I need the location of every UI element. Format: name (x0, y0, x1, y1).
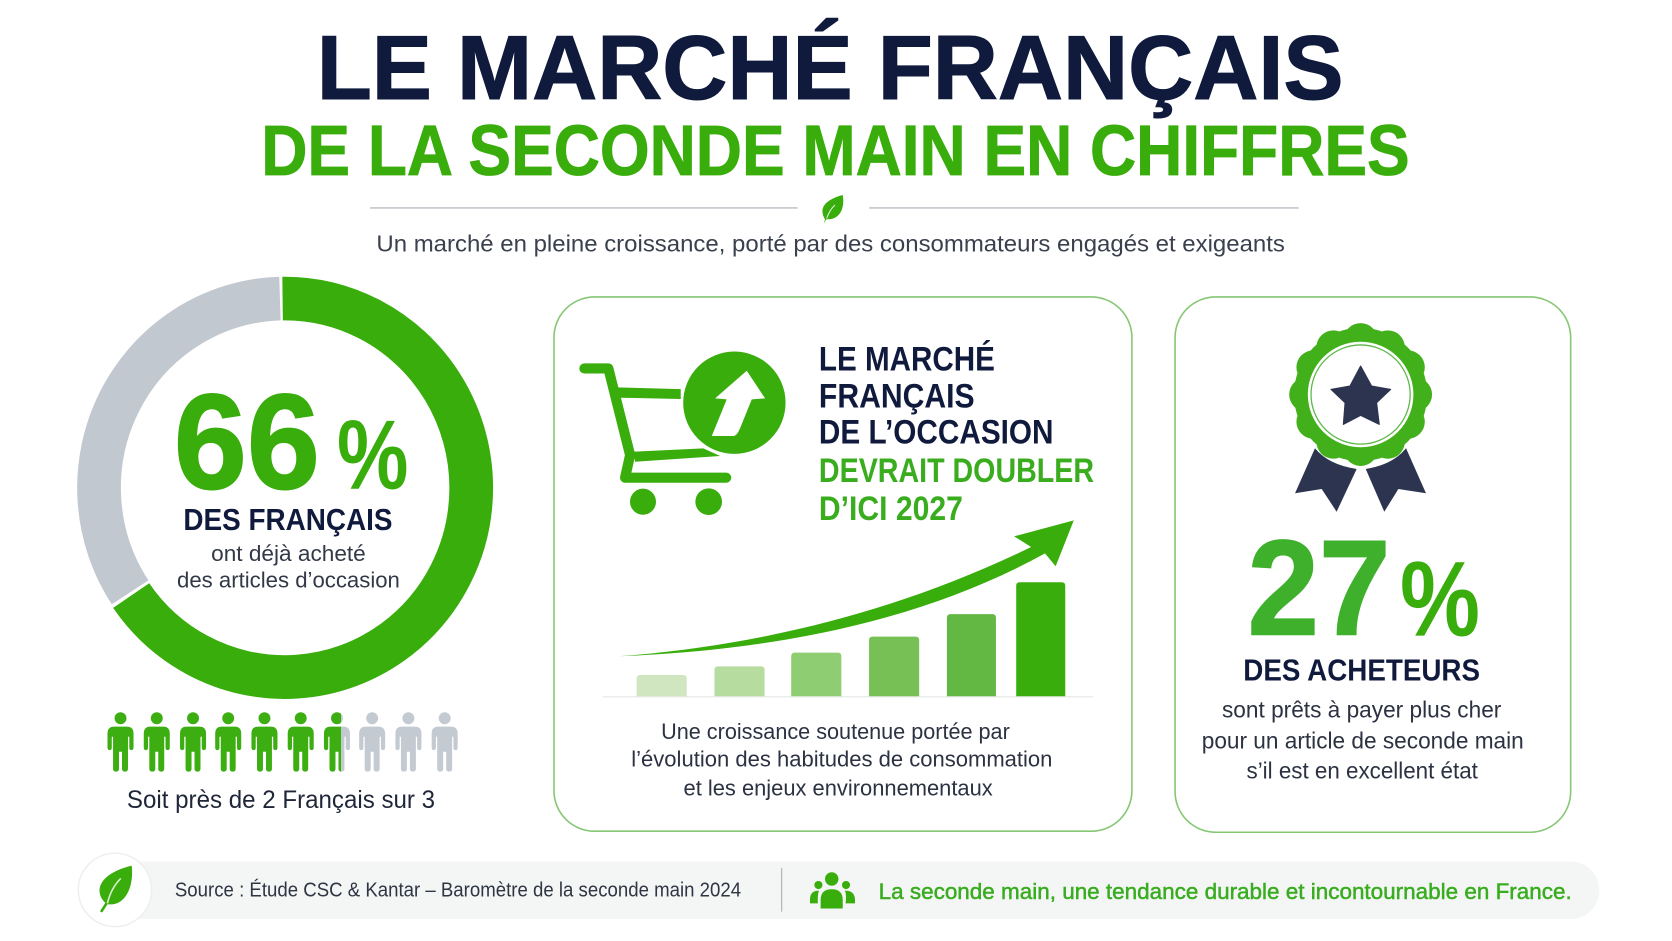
donut chart (99, 299, 471, 677)
footer bar (78, 853, 1599, 927)
bar chart (602, 582, 1093, 697)
text: description: ont déjà acheté (211, 541, 366, 566)
text: description: pour un article de seconde main (1202, 728, 1524, 754)
text: description: Une croissance soutenue portée par (661, 719, 1010, 744)
stat: 66%: 66 (174, 365, 320, 517)
text: des français: DES FRANÇAIS (183, 502, 392, 537)
heading: D’ICI 2027 (819, 490, 963, 528)
text: description: des articles d’occasion (177, 568, 400, 593)
stat: 27% (1248, 511, 1480, 663)
heading: DEVRAIT DOUBLER (819, 452, 1094, 490)
text: description: et les enjeux environnementaux (684, 775, 993, 800)
icon: award badge (1289, 323, 1432, 512)
icon: shopping cart (584, 352, 786, 515)
icon: group of people (810, 872, 855, 908)
title: DE LA SECONDE MAIN EN CHIFFRES (261, 111, 1410, 191)
heading: FRANÇAIS (819, 377, 975, 415)
subtitle: Un marché en pleine croissance, porté par des consommateurs engagés et exigeants (376, 231, 1285, 257)
panel: market growth (554, 297, 1132, 831)
title: LE MARCHÉ FRANÇAIS (317, 18, 1344, 119)
panel: 66 percent (99, 299, 471, 814)
caption: Soit près de 2 Français sur 3 (127, 787, 435, 814)
panel: 27 percent (1175, 297, 1571, 832)
text: description: s’il est en excellent état (1247, 757, 1478, 783)
text: description: l’évolution des habitudes de consommation (631, 747, 1052, 772)
text: description (1202, 697, 1524, 783)
heading: DE L’OCCASION (819, 414, 1054, 452)
heading: LE MARCHÉ (819, 341, 995, 379)
pictogram: people row (108, 712, 458, 772)
source: Source : Étude CSC & Kantar – Baromètre de la seconde main 2024 (175, 879, 741, 902)
text: des acheteurs: DES ACHETEURS (1243, 652, 1480, 687)
stat: 66% (174, 365, 408, 517)
text: description: sont prêts à payer plus cher (1222, 697, 1502, 723)
stat: 27%: 27 (1248, 511, 1390, 663)
icon: leaf badge (78, 853, 152, 927)
icon: leaf divider (822, 195, 843, 223)
heading (819, 341, 1094, 528)
title (261, 18, 1410, 191)
stat: 27%: % (1400, 539, 1480, 659)
text: description (177, 541, 400, 593)
text: description (631, 719, 1052, 800)
arrow: growth curve (618, 520, 1074, 656)
tagline: La seconde main, une tendance durable et incontournable en France. (879, 879, 1572, 904)
stat: 66%: % (337, 399, 408, 509)
